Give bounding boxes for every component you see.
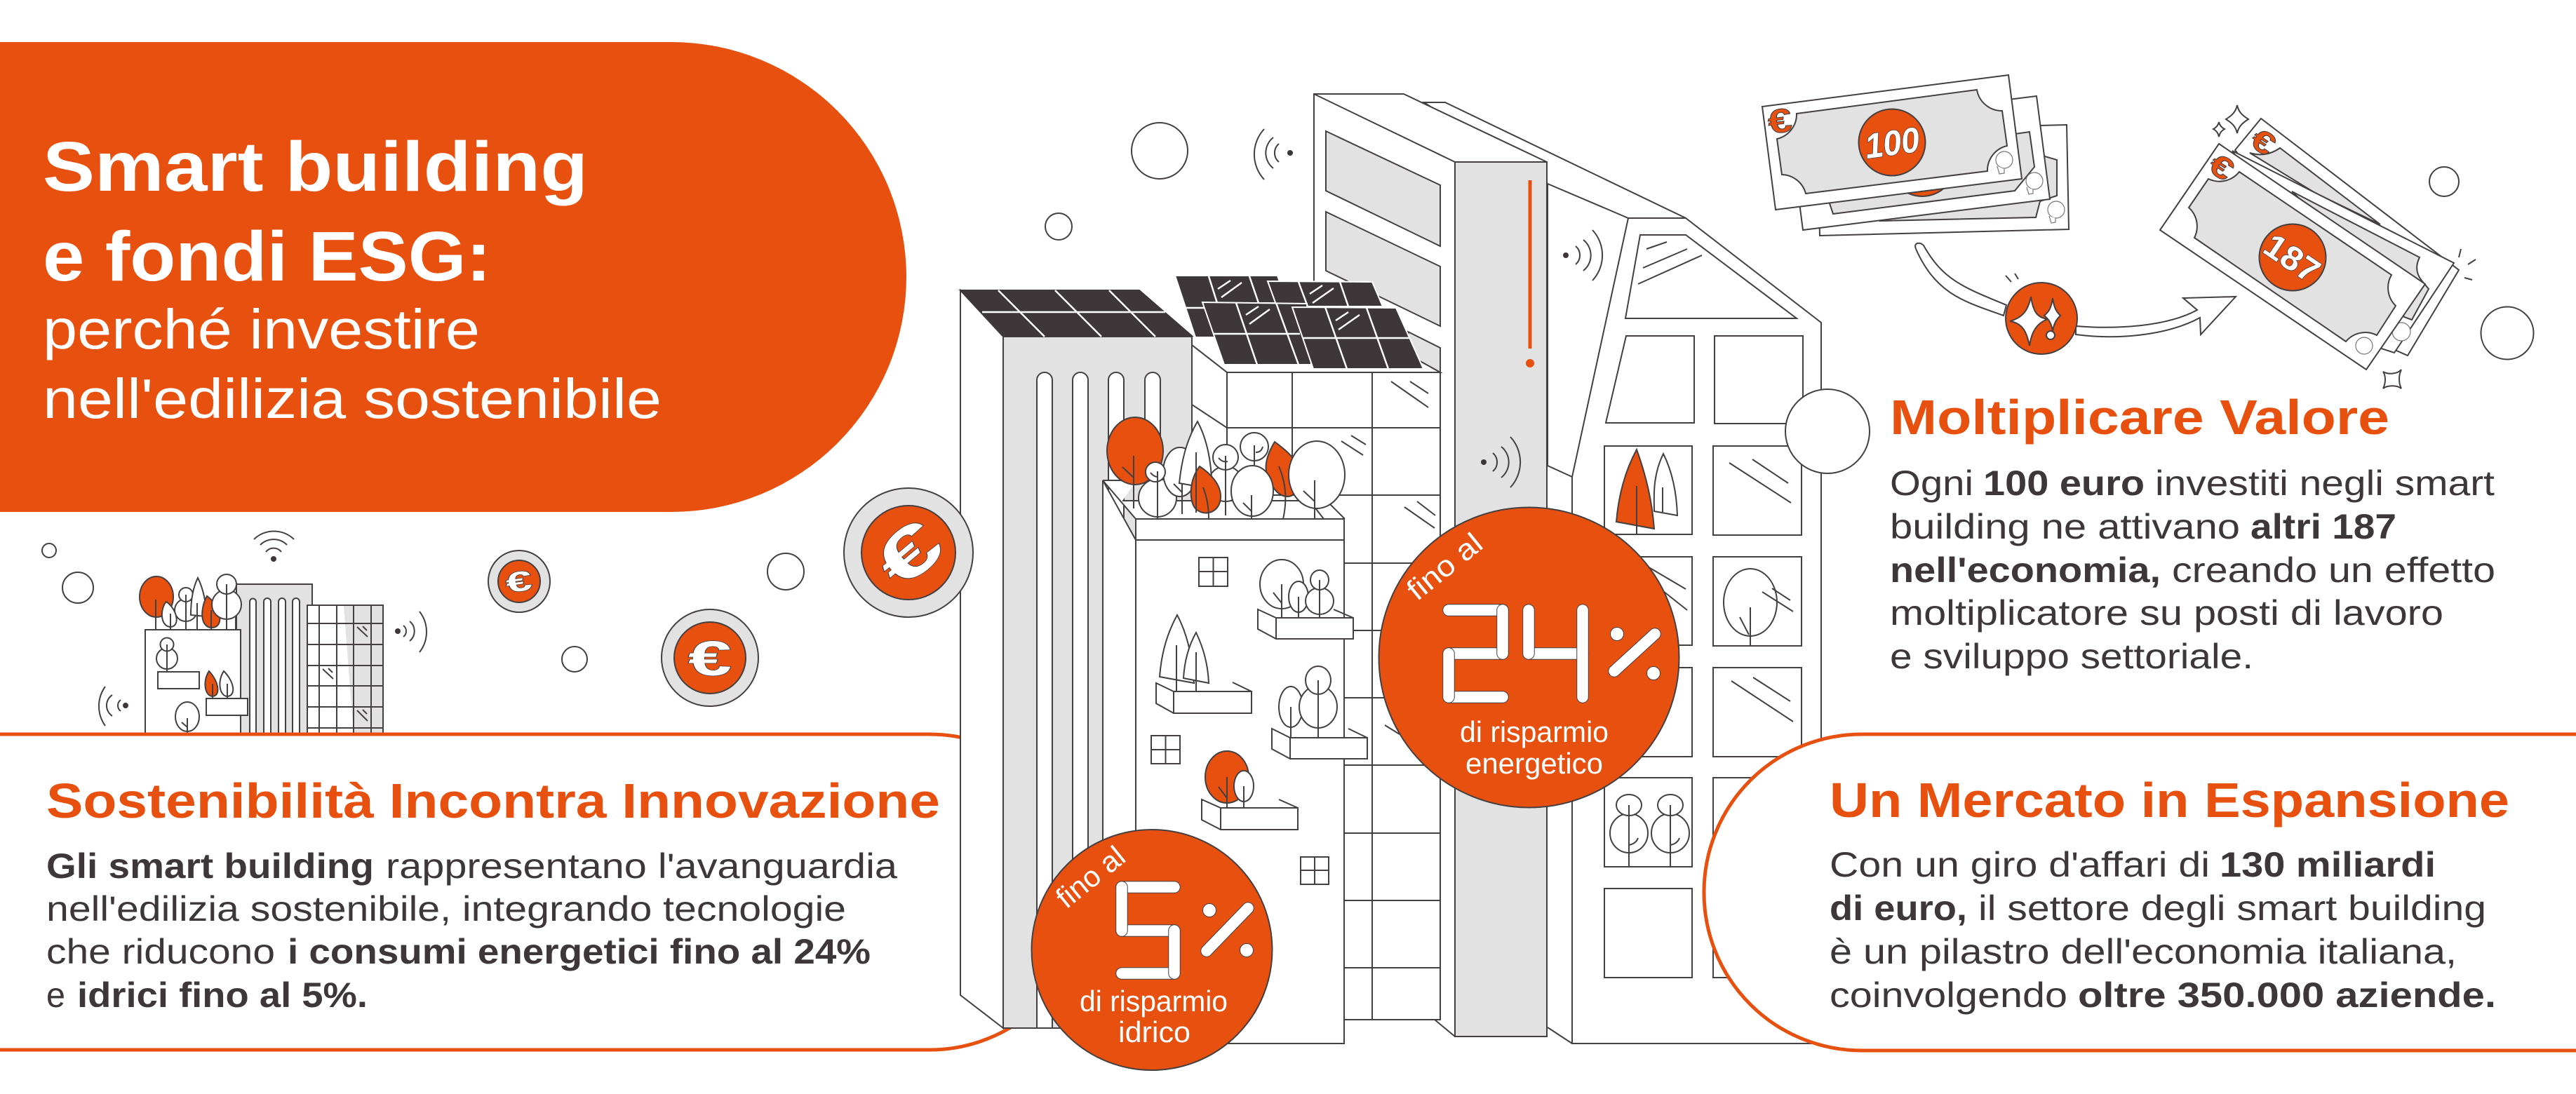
wall window 3 xyxy=(1301,857,1329,884)
body text: idrici fino al 5%. xyxy=(77,975,368,1015)
body text: Gli smart building xyxy=(46,846,374,886)
floating coins and circles: € xyxy=(504,565,534,599)
planter 2 xyxy=(1156,615,1252,713)
body text: rappresentano l'avanguardia xyxy=(386,846,897,886)
solar panels xyxy=(1175,276,1423,369)
body text: i consumi energetici fino al 24% xyxy=(288,932,871,971)
body text: oltre 350.000 aziende. xyxy=(2078,975,2496,1015)
building: green terraces xyxy=(1103,417,1367,1044)
roof garden xyxy=(1103,417,1345,540)
badge: 5% water saving: di risparmio xyxy=(1080,985,1228,1018)
heading: Un Mercato in Espansione xyxy=(1830,773,2509,828)
body text xyxy=(46,846,897,1015)
badge: 5% water saving: fino al xyxy=(1049,839,1132,914)
body text: creando un effetto xyxy=(2172,551,2495,590)
solar roof xyxy=(960,290,1192,337)
large floating coin xyxy=(844,488,973,617)
body text: coinvolgendo xyxy=(1830,975,2067,1015)
planter 4 xyxy=(1202,751,1298,830)
body text: 100 euro xyxy=(1983,464,2145,503)
wall window 1 xyxy=(1199,558,1228,586)
body text: è un pilastro dell'economia italiana, xyxy=(1830,932,2457,971)
body text: il settore degli smart building xyxy=(1978,889,2486,928)
floating coins and circles xyxy=(488,551,804,706)
text block: moltiplicare valore xyxy=(1890,390,2495,676)
panel: mercato xyxy=(1704,734,2576,1051)
title banner: Smart building xyxy=(43,128,588,206)
wall window 2 xyxy=(1151,736,1180,764)
heading: Sostenibilità Incontra Innovazione xyxy=(46,774,940,828)
building: right sloped xyxy=(1424,102,1821,1044)
body text: 130 miliardi xyxy=(2220,845,2436,884)
circle over right building xyxy=(1785,389,1870,473)
body text xyxy=(1830,845,2496,1015)
title banner: e fondi ESG: xyxy=(43,217,491,296)
building: middle grid with solar panels xyxy=(1175,276,1440,1020)
banknotes: 100: 100 xyxy=(1863,120,1922,166)
small building illustration xyxy=(42,531,427,734)
body text: che riducono xyxy=(46,932,275,971)
badge: 5% water saving: idrico xyxy=(1118,1015,1190,1048)
building: solar tower with slots xyxy=(960,290,1192,1028)
banknotes: 100: € xyxy=(1766,102,1794,142)
banknotes: 187: € xyxy=(2244,122,2282,163)
panel: sostenibilita xyxy=(0,734,1087,1050)
body text: nell'economia, xyxy=(1890,551,2161,590)
banknotes: 187: 187 xyxy=(2257,227,2326,291)
building: central tower xyxy=(1314,94,1547,1036)
banknotes: 100 xyxy=(1762,75,2069,236)
badge: 24% energy saving: di risparmio xyxy=(1460,715,1609,748)
body text: altri 187 xyxy=(2250,507,2396,546)
planter 3 xyxy=(1272,666,1367,759)
body text: building ne attivano xyxy=(1890,507,2240,546)
title banner: nell'edilizia sostenibile xyxy=(43,367,662,430)
badge: 24% energy saving: energetico xyxy=(1465,747,1603,780)
body text: moltiplicatore su posti di lavoro xyxy=(1890,593,2443,633)
planter 1 xyxy=(1258,560,1353,639)
banknotes: 187 xyxy=(2160,105,2534,389)
badge: 24% energy saving: fino al xyxy=(1400,526,1489,607)
badge: 24% energy saving xyxy=(1379,508,1679,808)
heading: Moltiplicare Valore xyxy=(1890,390,2389,445)
floating coins and circles: € xyxy=(688,631,732,686)
title banner: perché investire xyxy=(43,298,480,360)
decorative sky circles and wifi xyxy=(1045,123,1293,240)
body text: e sviluppo settoriale. xyxy=(1890,637,2253,676)
body text: nell'edilizia sostenibile, integrando tecnologie xyxy=(46,889,846,928)
title banner xyxy=(0,42,906,512)
body text: e xyxy=(46,975,65,1015)
body text xyxy=(1890,464,2495,676)
badge: 5% water saving xyxy=(1031,830,1273,1070)
body text: investiti negli smart xyxy=(2155,464,2495,503)
body text: Ogni xyxy=(1890,464,1973,503)
arrow with sparkle xyxy=(1915,243,2236,354)
large floating coin: € xyxy=(861,504,958,602)
body text: Con un giro d'affari di xyxy=(1830,845,2210,884)
banknotes: 187: € xyxy=(2202,147,2240,188)
body text: di euro, xyxy=(1830,889,1967,928)
